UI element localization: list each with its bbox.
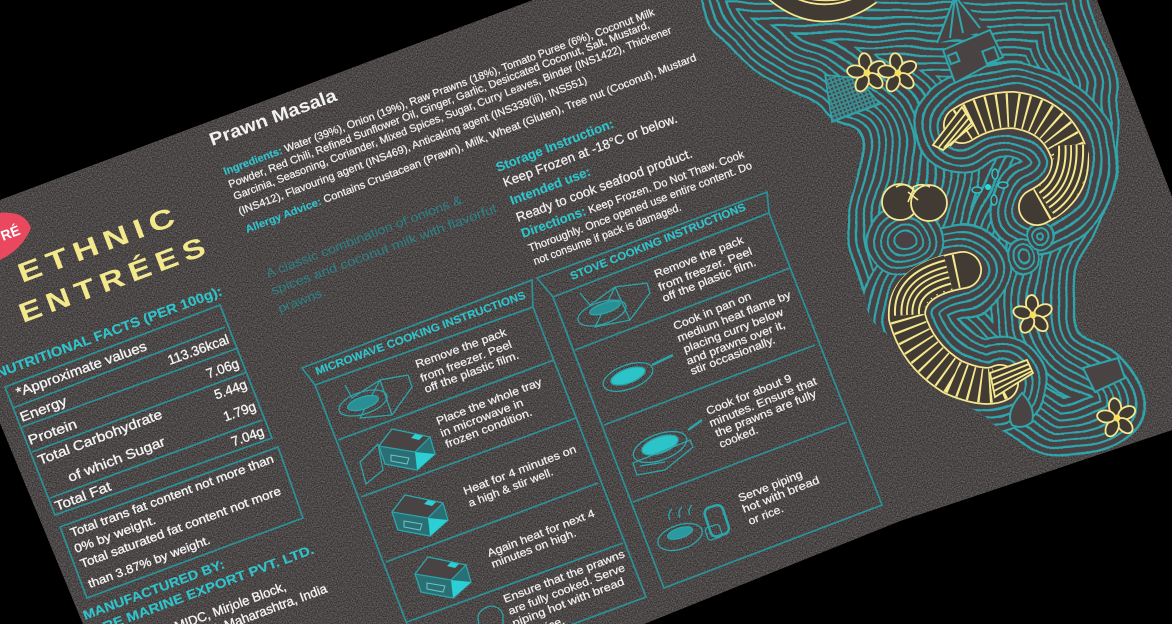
illustration: contour river xyxy=(696,0,1145,458)
step text: Again heat for next 4 xyxy=(486,508,597,560)
step text: from freezer. Peel xyxy=(657,246,754,294)
nutrition table: Total Carbohydrate xyxy=(36,406,164,468)
icon: flower pair xyxy=(846,52,918,92)
panel: microwave instructions: MICROWAVE COOKING INSTRUCTIONS xyxy=(314,290,527,378)
step text: Remove the pack xyxy=(414,327,509,371)
fat notes box: Total saturated fat content not more xyxy=(78,484,283,571)
ingredients text: Allergy Advice: Contains Crustacean (Prawn), Milk, Wheat (Gluten), Tree nut (Coconut), Mustard xyxy=(244,52,698,236)
step text: cooked. xyxy=(718,424,760,451)
step text: from freezer. Peel xyxy=(419,339,514,385)
nutrition table xyxy=(5,305,272,515)
ingredients text: Ingredients: Water (39%), Onion (19%), Raw Prawns (18%), Tomato Puree (6%), Coconut Milk xyxy=(222,6,657,178)
ingredients text: Garcinia, Seasoning, Coriander, Mixed Spices, Sugar, Curry Leaves, Binder (INS1422), Thickener xyxy=(232,24,674,203)
fat notes box xyxy=(60,447,303,598)
step text xyxy=(414,327,627,624)
icon: garlic xyxy=(1010,393,1033,427)
step text: medium heat flame by xyxy=(676,289,793,345)
step text: and prawns over it, xyxy=(685,319,787,368)
brand heading xyxy=(18,210,204,322)
ingredients text: (INS412), Flavouring agent (INS469), Anticaking agent (INS339(iii), INS551) xyxy=(237,74,589,218)
icon: cyan blossom xyxy=(972,169,1008,205)
step text: off the plastic film. xyxy=(423,350,521,396)
illustration: onions xyxy=(882,184,947,221)
nutrition table: 5.44g xyxy=(212,377,249,402)
storage and directions text: Intended use: xyxy=(508,164,593,208)
icon: pan with curry xyxy=(602,354,674,392)
illustration: upper prawn xyxy=(933,107,1071,207)
step text: minutes. Ensure that xyxy=(708,376,819,430)
nutrition table: 113.36kcal xyxy=(165,332,231,368)
storage and directions text: Ready to cook seafood product. xyxy=(514,146,694,225)
icon: box xyxy=(1083,358,1125,392)
step text: Remove the pack xyxy=(653,234,746,281)
storage and directions text: Storage Instruction: xyxy=(494,116,616,175)
product title: Prawn Masala xyxy=(207,85,340,150)
brand heading: ENTRÉES xyxy=(14,228,215,329)
icon: flower xyxy=(1012,294,1053,334)
fat notes box: Total trans fat content not more than xyxy=(68,452,276,540)
badge xyxy=(0,213,31,261)
step text: Cook in pan on xyxy=(672,291,753,333)
icon: microwave 3 xyxy=(392,495,448,536)
icon: bowl partial xyxy=(478,606,503,624)
storage and directions text: Thoroughly. Once opened use entire content. Do xyxy=(527,160,754,255)
step text: a high & stir well. xyxy=(467,466,555,510)
nutrition table: Protein xyxy=(26,416,79,448)
icon: house xyxy=(937,0,1003,83)
step text: stir occasionally. xyxy=(689,334,777,378)
panel: microwave instructions xyxy=(302,280,646,624)
nutrition table: 1.79g xyxy=(221,399,258,424)
step text: Cook for about 9 xyxy=(705,373,793,418)
illustration: top prawn xyxy=(775,0,868,7)
nutrition table: 7.06g xyxy=(204,356,241,381)
nutrition table: *Approximate values xyxy=(14,338,149,400)
product description: prawns. xyxy=(276,285,328,316)
step text: off the plastic film. xyxy=(661,257,758,305)
brand heading: ETHNIC xyxy=(13,199,185,289)
icon: pan on stove xyxy=(629,420,702,475)
step text: are fully cooked. Serve xyxy=(507,562,627,618)
storage and directions text: Directions: Keep Frozen. Do Not Thaw. Cook xyxy=(519,146,746,241)
step text: Ensure that the prawns xyxy=(502,548,627,606)
manufacturer: MANUFACTURED BY: xyxy=(81,556,227,623)
icon: pack and bowl xyxy=(336,375,412,421)
storage and directions text: Keep Frozen at -18°C or below. xyxy=(501,111,679,190)
icon: open microwave xyxy=(360,429,435,484)
step text: or rice. xyxy=(747,503,786,528)
step text: hot with bread xyxy=(741,474,821,516)
fat notes box: than 3.87% by weight. xyxy=(86,533,212,591)
step text: minutes on high. xyxy=(490,527,578,571)
icon: microwave 4 xyxy=(415,557,471,598)
icon: flower lower xyxy=(1096,397,1136,438)
panel: stove instructions: STOVE COOKING INSTRUCTIONS xyxy=(569,202,748,283)
panel: stove instructions xyxy=(537,192,882,588)
icon: bowl and bread xyxy=(657,504,730,552)
nutritional heading: NUTRITIONAL FACTS (PER 100g): xyxy=(0,283,224,381)
icon: hatched block xyxy=(825,75,880,122)
icon: pack and pan xyxy=(575,283,650,331)
fat notes box: 0% by weight. xyxy=(72,513,158,556)
storage and directions text: not consume if pack is damaged. xyxy=(532,202,683,268)
step text: placing curry below xyxy=(682,307,785,356)
step text: the prawns are fully xyxy=(714,388,819,440)
product description: A classic combination of onions & xyxy=(264,193,465,281)
ingredients text: Powder, Red Chili, Refined Sunflower Oil, Ginger, Garlic, Desiccated Coconut, Salt, Mustard, xyxy=(227,19,651,191)
step text: Serve piping xyxy=(737,469,804,505)
nutrition table: of which Sugar xyxy=(66,434,168,485)
step text: Place the whole tray xyxy=(435,376,544,428)
nutrition table: Total Fat xyxy=(53,479,113,514)
step text: frozen condition. xyxy=(444,407,534,451)
step text xyxy=(653,234,821,528)
nutrition table: 7.04g xyxy=(229,424,266,449)
step text: Heat for 4 minutes on xyxy=(462,444,578,498)
product description: spices and coconut milk with flavorful xyxy=(269,202,498,298)
storage and directions text xyxy=(494,111,754,268)
nutrition table: Energy xyxy=(18,393,69,425)
step text: in microwave in xyxy=(439,397,525,440)
illustration: lower prawn xyxy=(907,270,1033,397)
product description xyxy=(264,193,498,316)
